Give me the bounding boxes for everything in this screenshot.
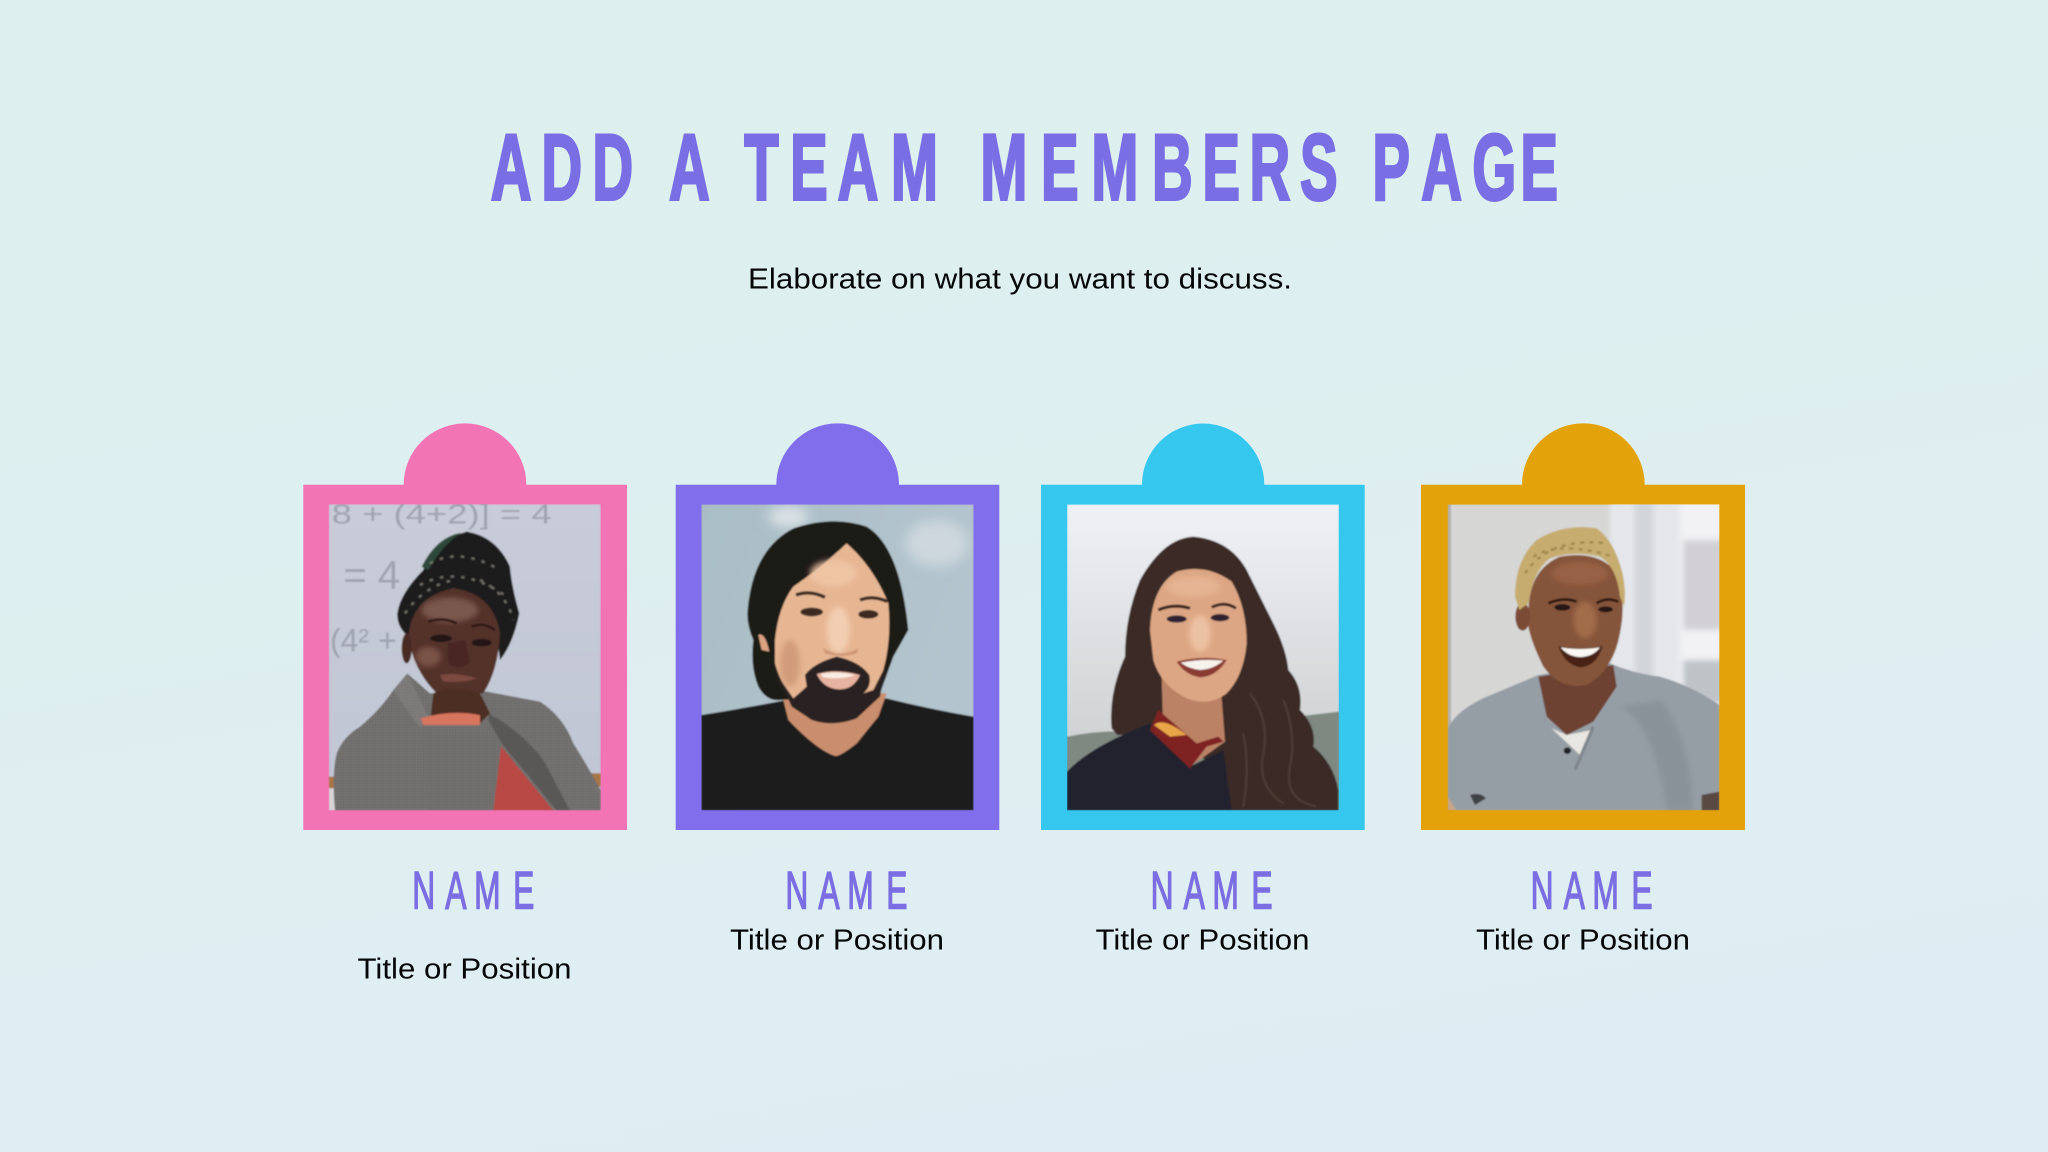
frame: cyan [1041, 424, 1365, 830]
panel: team member 4 [1421, 423, 1745, 956]
photo: woman at whiteboard: 8 + (4+2)] = 4 [332, 498, 552, 529]
position: Title or Position [1476, 924, 1690, 956]
photo: smiling man with blond hair [1448, 500, 1723, 810]
panel: team member 3 [1041, 424, 1365, 956]
position: Title or Position [1096, 924, 1310, 956]
panel: team member 1 [303, 423, 627, 985]
title: ADD A TEAM MEMBERS PAGE [491, 116, 1558, 220]
name: NAME [785, 861, 907, 921]
frame: gold [1421, 423, 1745, 830]
photo: woman at whiteboard [329, 498, 601, 810]
frame: pink [303, 423, 627, 830]
name: NAME [1531, 861, 1653, 921]
name: NAME [1151, 861, 1273, 921]
position: Title or Position [358, 953, 572, 985]
photo: woman at whiteboard: = 4 [343, 553, 400, 597]
panel: team member 2 [676, 423, 999, 956]
photo: man with goatee [701, 504, 974, 810]
photo: woman at whiteboard: (4² + [330, 623, 397, 659]
subtitle: Elaborate on what you want to discuss. [748, 263, 1292, 295]
name: NAME [412, 861, 534, 921]
slide: team members page [303, 132, 1745, 979]
photo: smiling woman with long hair [1067, 504, 1339, 810]
frame: purple [676, 423, 999, 830]
position: Title or Position [730, 924, 944, 956]
